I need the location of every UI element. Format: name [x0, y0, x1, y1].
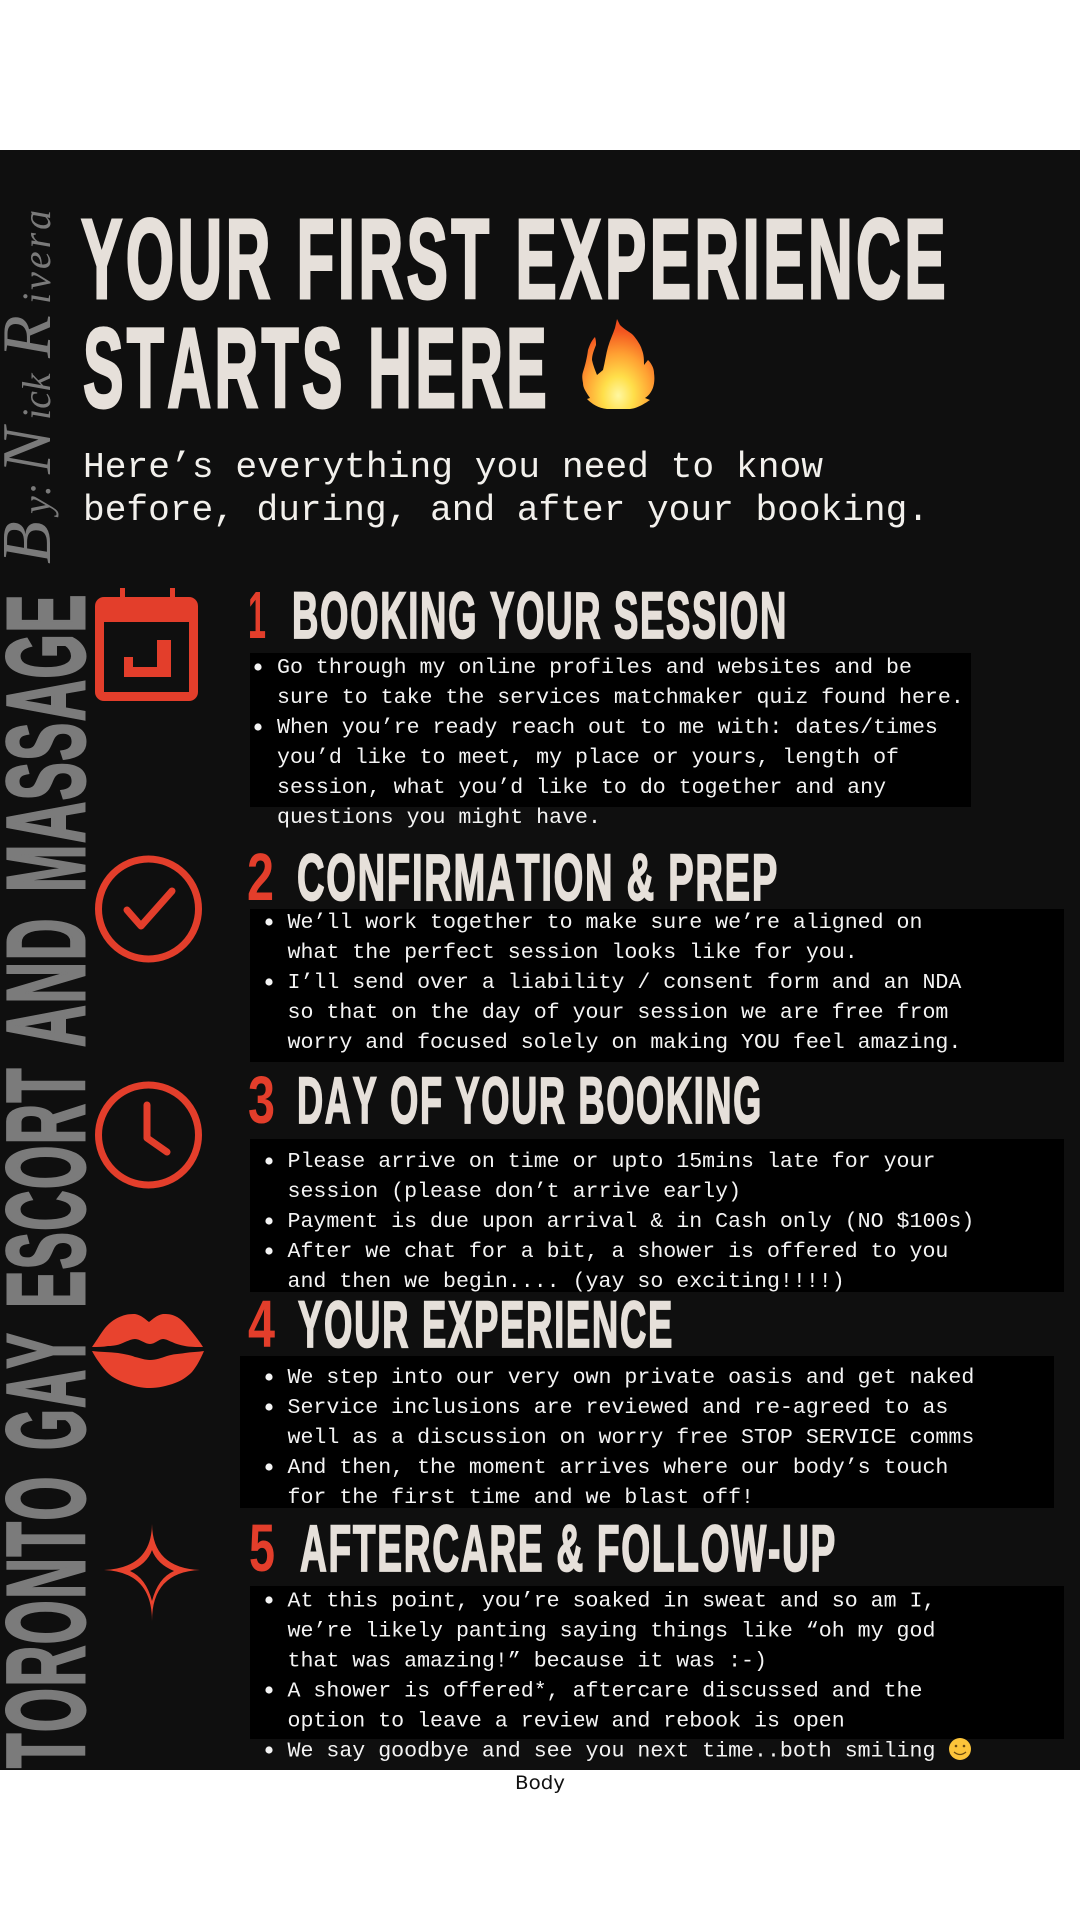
- subtitle: Here’s everything you need to know: [83, 447, 823, 488]
- bullet list 4: [265, 1366, 974, 1510]
- section 5: aftercare and follow-up: [249, 1511, 1064, 1764]
- section 3: day of your booking: [248, 1063, 1064, 1294]
- icon: smiley emoji: [949, 1738, 971, 1760]
- bullet list 4: And then, the moment arrives where our body’s touch: [288, 1456, 948, 1480]
- section 2: confirmation and prep: [247, 840, 1064, 1062]
- title: STARTS HERE: [83, 305, 550, 431]
- bullet list 2: what the perfect session looks like for you.: [288, 941, 858, 965]
- bullet list 2: [265, 911, 961, 1055]
- caption: Body: Body: [515, 1772, 565, 1794]
- bullet list 4: We step into our very own private oasis and get naked: [288, 1366, 974, 1390]
- vertical byline: By: Nick Rivera: ick: [14, 372, 59, 420]
- bullet list 1: [254, 656, 964, 830]
- heading 4: YOUR EXPERIENCE: [298, 1287, 674, 1361]
- bullet list 4: for the first time and we blast off!: [288, 1486, 754, 1510]
- bullet list 3: session (please don’t arrive early): [288, 1180, 741, 1204]
- bullet list 2: I’ll send over a liability / consent form and an NDA: [288, 971, 961, 995]
- black text box 5: [250, 1586, 1064, 1739]
- bullet list 1: session, what you’d like to do together and any: [277, 776, 886, 800]
- subtitle: before, during, and after your booking.: [83, 490, 929, 531]
- subtitle: [83, 447, 929, 531]
- bullet list 5: option to leave a review and rebook is open: [288, 1710, 845, 1734]
- bullet list 5: We say goodbye and see you next time..both smiling: [288, 1740, 935, 1764]
- bullet list 2: so that on the day of your session we are free from: [288, 1001, 948, 1025]
- vertical byline: By: Nick Rivera: ivera: [14, 207, 59, 304]
- bullet list 5: we’re likely panting saying things like “oh my god: [288, 1620, 935, 1644]
- bullet list 5: [265, 1590, 935, 1764]
- section 1: booking your session: 1: [248, 578, 266, 653]
- step number 2: 2: [247, 840, 274, 915]
- bullet list 1: questions you might have.: [277, 806, 601, 830]
- bullet list 5: A shower is offered*, aftercare discussed and the: [288, 1680, 922, 1704]
- icon: sparkle star: [104, 1523, 200, 1621]
- bullet list 2: worry and focused solely on making YOU feel amazing.: [288, 1031, 961, 1055]
- bullet list 3: Please arrive on time or upto 15mins late for your: [288, 1150, 935, 1174]
- section 1: booking your session: [248, 578, 971, 830]
- icon: calendar: [95, 588, 198, 701]
- section 4: your experience: [240, 1287, 1054, 1510]
- black text box 4: [240, 1356, 1054, 1508]
- step number 4: 4: [248, 1287, 275, 1362]
- vertical side title: [0, 593, 108, 1768]
- bullet list 1: you’d like to meet, my place or yours, length of: [277, 746, 899, 770]
- black text box 3: [250, 1139, 1064, 1292]
- bullet list 4: well as a discussion on worry free STOP SERVICE comms: [288, 1426, 974, 1450]
- bullet list 1: When you’re ready reach out to me with: dates/times: [277, 716, 938, 740]
- bullet list 5: At this point, you’re soaked in sweat and so am I,: [288, 1590, 935, 1614]
- black text box 2: [250, 909, 1064, 1062]
- bullet list 3: [265, 1150, 974, 1294]
- bullet list 5: that was amazing!” because it was :-): [288, 1650, 767, 1674]
- bullet list 2: We’ll work together to make sure we’re aligned on: [288, 911, 922, 935]
- vertical byline: By: Nick Rivera: y:: [14, 483, 59, 518]
- bullet list 3: After we chat for a bit, a shower is offered to you: [288, 1240, 948, 1264]
- step number 3: 3: [248, 1063, 275, 1138]
- icon: lips: [92, 1314, 204, 1388]
- title: [81, 196, 949, 431]
- step number 5: 5: [249, 1511, 275, 1586]
- bullet list 3: and then we begin.... (yay so exciting!!!!): [288, 1270, 845, 1294]
- bullet list 1: sure to take the services matchmaker quiz found here.: [277, 686, 964, 710]
- icon: fire emoji: [582, 319, 654, 409]
- bullet list 1: Go through my online profiles and websites and be: [277, 656, 912, 680]
- bullet list 4: Service inclusions are reviewed and re-agreed to as: [288, 1396, 948, 1420]
- bullet list 3: Payment is due upon arrival & in Cash only (NO $100s): [288, 1210, 974, 1234]
- icon: check circle: [98, 859, 198, 959]
- icon: clock: [98, 1085, 198, 1185]
- black text box 1: [250, 653, 971, 807]
